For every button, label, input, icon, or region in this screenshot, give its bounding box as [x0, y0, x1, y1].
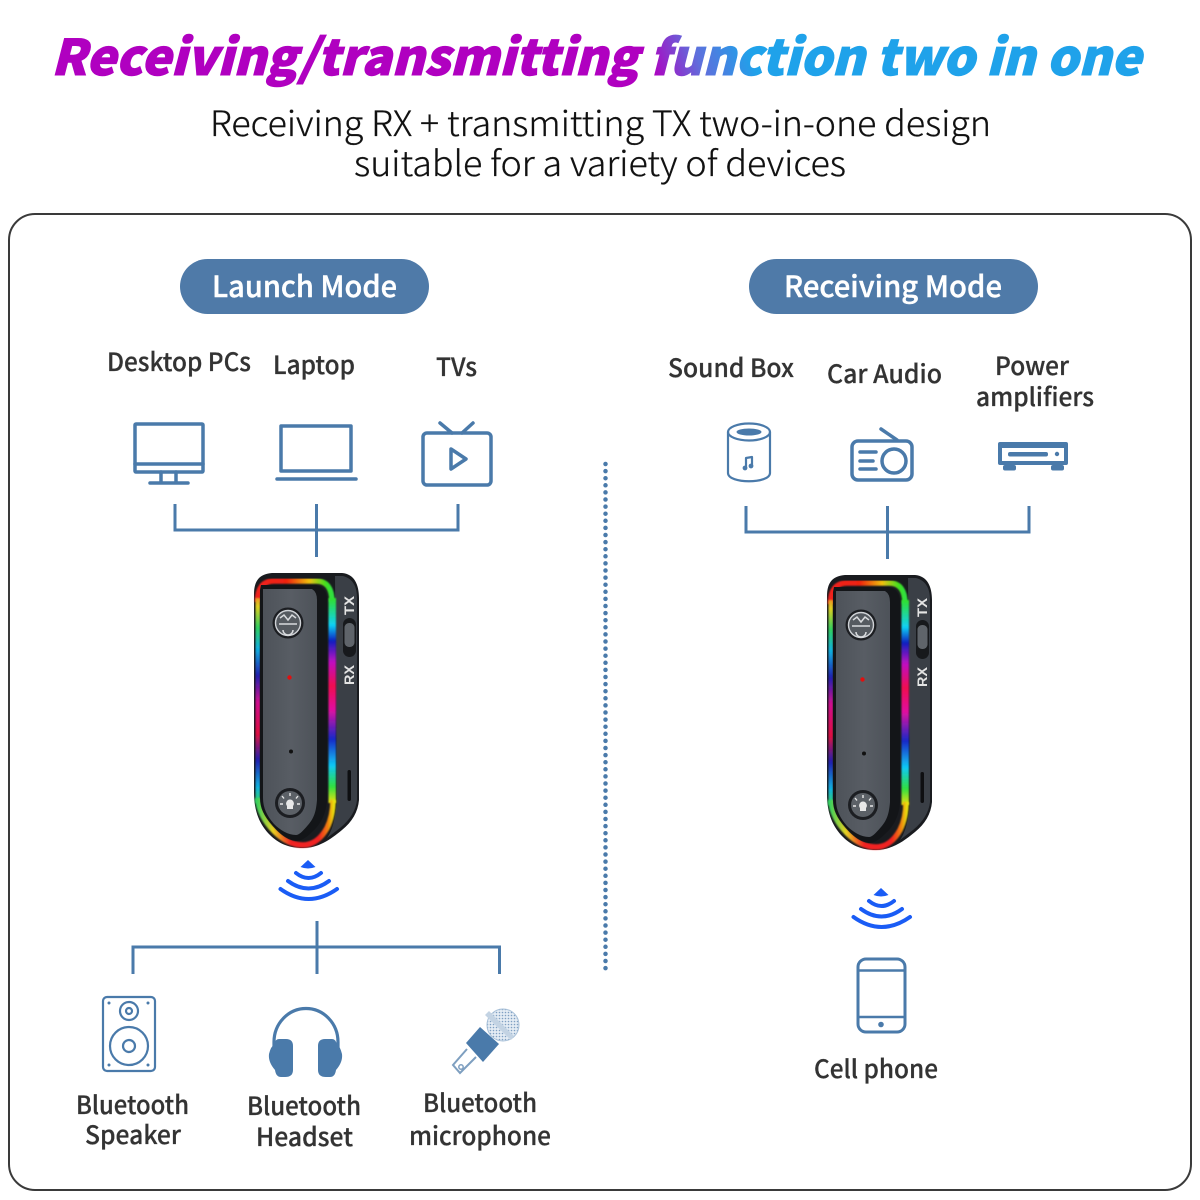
connector: launch sources	[175, 504, 458, 557]
device: left adapter: RX	[341, 664, 357, 685]
icon: sound box	[728, 424, 770, 481]
connector: launch outputs	[133, 921, 500, 974]
label: Bluetooth microphone	[409, 1084, 551, 1153]
title: Receiving/transmitting function two in one	[51, 19, 1145, 90]
label: Car Audio: Car Audio	[827, 355, 942, 391]
label: Power amplifiers: amplifiers	[976, 378, 1094, 414]
label: Bluetooth Headset	[247, 1087, 361, 1154]
divider: dotted line	[603, 464, 608, 970]
connector: receiving sources	[746, 506, 1029, 559]
device: right adapter: RX	[914, 666, 930, 687]
icon: power amplifier	[998, 442, 1068, 470]
icon: wireless signal right	[854, 888, 910, 927]
label: Bluetooth Headset: Bluetooth	[247, 1087, 361, 1123]
label: Sound Box: Sound Box	[668, 349, 794, 385]
icon: bluetooth microphone	[453, 1009, 519, 1073]
icon: cell phone	[858, 959, 905, 1032]
icon: TV	[423, 423, 491, 485]
label: Bluetooth microphone: microphone	[409, 1117, 551, 1153]
label: Bluetooth Speaker: Speaker	[85, 1116, 182, 1152]
subtitle: suitable for a variety of devices	[354, 136, 846, 187]
heading pill: Receiving Mode	[749, 259, 1038, 314]
device: left adapter: TX	[341, 595, 357, 615]
label: Bluetooth Speaker	[76, 1086, 189, 1152]
icon: laptop	[277, 426, 356, 479]
label: Laptop: Laptop	[273, 346, 355, 382]
icon: car radio	[852, 429, 912, 480]
icon: bluetooth headset	[269, 1008, 342, 1077]
icon: bluetooth speaker	[103, 997, 155, 1071]
device: right adapter: TX	[914, 597, 930, 617]
subtitle	[210, 96, 991, 187]
device: right adapter	[827, 575, 932, 850]
label: Cell phone: Cell phone	[814, 1050, 938, 1086]
label: TVs: TVs	[436, 348, 477, 384]
device: left adapter	[254, 573, 359, 848]
heading pill: Launch Mode: Launch Mode	[212, 264, 397, 306]
label: Bluetooth Speaker: Bluetooth	[76, 1086, 189, 1122]
label: Desktop PCs: Desktop PCs	[107, 343, 251, 379]
heading pill: Receiving Mode: Receiving Mode	[784, 264, 1002, 306]
label: Bluetooth Headset: Headset	[256, 1118, 353, 1154]
icon: wireless signal left	[280, 860, 337, 899]
heading pill: Launch Mode	[180, 259, 429, 314]
label: Power amplifiers: Power	[995, 347, 1070, 383]
label: Bluetooth microphone: Bluetooth	[423, 1084, 537, 1120]
icon: desktop monitor	[135, 424, 203, 483]
subtitle: Receiving RX + transmitting TX two-in-one design	[210, 96, 991, 147]
label: Power amplifiers	[976, 347, 1094, 414]
